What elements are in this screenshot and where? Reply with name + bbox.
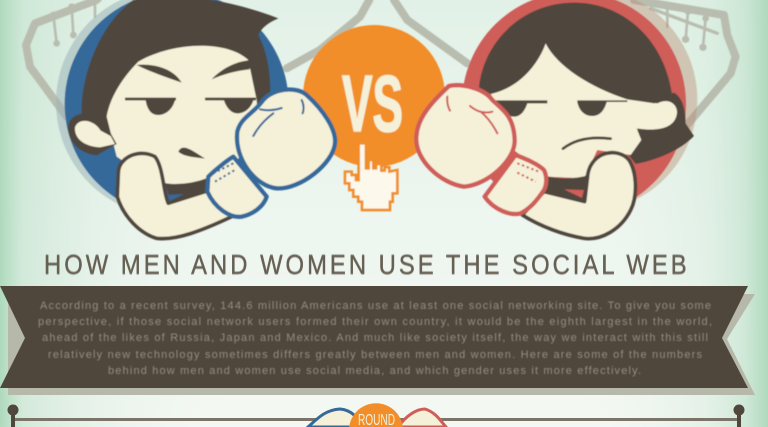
man hair bbox=[82, 0, 278, 133]
woman face bbox=[491, 40, 677, 178]
round left glove bbox=[308, 409, 362, 427]
left guitar outline bbox=[26, 0, 369, 117]
man boxer character bbox=[56, 0, 335, 239]
ribbon shadow bbox=[8, 294, 755, 395]
woman mouth bbox=[563, 138, 611, 149]
icon: pointer hand cursor bbox=[345, 143, 397, 210]
ribbon body text: ahead of the likes of Russia, Japan and Mexico. And much like society itself, the way we interact with this still bbox=[42, 332, 708, 344]
man glove bbox=[237, 89, 335, 188]
woman back hair bbox=[627, 93, 694, 164]
title: HOW MEN AND WOMEN USE THE SOCIAL WEB bbox=[44, 248, 687, 280]
man ear bbox=[68, 114, 117, 155]
ribbon body text bbox=[38, 300, 712, 377]
man eyebrows bbox=[137, 60, 254, 83]
woman glove bbox=[416, 85, 515, 187]
orange VS circle bbox=[303, 25, 445, 167]
woman glove creases bbox=[447, 97, 497, 133]
illustration: boxers and VS bbox=[26, 0, 736, 239]
round orange badge bbox=[349, 403, 403, 427]
ribbon body text: perspective, if those social network users formed their own country, it would be the eighth largest in the world, bbox=[38, 316, 712, 328]
man cuff laces bbox=[213, 163, 235, 182]
ribbon body text: According to a recent survey, 144.6 million Americans use at least one social networking site. To give you some bbox=[40, 300, 711, 312]
round badge with gloves bbox=[308, 403, 446, 427]
woman arm bbox=[522, 153, 635, 239]
boxing ring ropes and posts bbox=[8, 404, 744, 427]
man eyes bbox=[125, 98, 256, 115]
man blue circle bbox=[65, 0, 289, 216]
man nose bbox=[178, 148, 205, 159]
ribbon body text: relatively new technology sometimes differs greatly between men and women. Here are some of the numbers bbox=[48, 349, 702, 361]
woman boxer character bbox=[416, 0, 697, 239]
round right glove bbox=[398, 409, 446, 427]
woman shadow circle bbox=[473, 0, 697, 212]
VS label: VS bbox=[342, 59, 403, 148]
man shadow circle bbox=[56, 0, 284, 217]
woman glove cuff bbox=[485, 155, 546, 214]
right guitar outline bbox=[394, 0, 736, 127]
man arm bbox=[117, 153, 232, 239]
woman red circle bbox=[462, 0, 686, 216]
man glove cuff bbox=[207, 157, 267, 217]
woman hair bbox=[479, 3, 672, 103]
ribbon body bbox=[0, 286, 748, 388]
ribbon body text: behind how men and women use social media, and which gender uses it more effectively. bbox=[108, 365, 641, 377]
woman cuff laces bbox=[517, 163, 539, 182]
man neck bbox=[165, 177, 217, 204]
man glove creases bbox=[253, 100, 304, 136]
woman neck bbox=[541, 175, 589, 203]
man face bbox=[107, 46, 257, 185]
intro ribbon bbox=[0, 286, 755, 395]
woman eyes bbox=[496, 100, 627, 117]
